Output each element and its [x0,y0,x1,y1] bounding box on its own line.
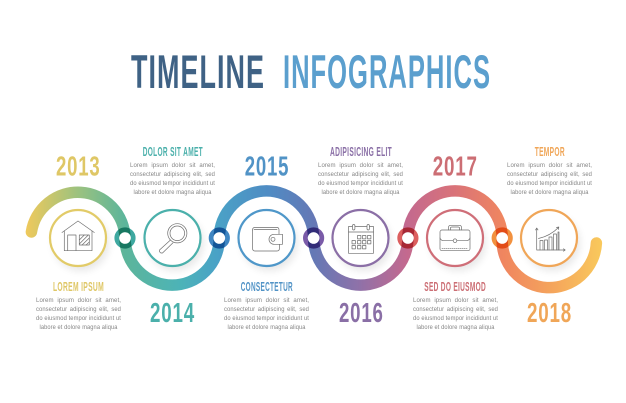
circle: 2018 [521,210,577,266]
icon: magnifying glass [159,224,187,253]
node 5 [494,230,510,246]
text block 3: labore et dolore magna aliqua [228,324,306,331]
node 1 [117,230,133,246]
circle: 2015 [238,210,294,266]
node centres [119,232,508,244]
text block 2: Lorem ipsum dolor sit amet, [130,162,215,169]
year 2017: 2017 [433,150,478,182]
year 2014: 2014 [150,297,195,328]
circle: 2016 [332,210,388,266]
circle: 2013 [50,210,106,266]
text block 1 [36,297,121,331]
text block 6: labore et dolore magna aliqua [510,189,589,196]
heading: consectetur: CONSECTETUR [241,280,293,294]
heading: tempor: TEMPOR [535,145,565,159]
text block 2: consectetur adipiscing elit, sed [130,171,215,178]
text block 4: labore et dolore magna aliqua [322,189,400,196]
icon: calendar [348,224,374,253]
wavy timeline ribbon [31,191,596,288]
year 2018: 2018 [527,297,572,328]
text block 5 [413,297,498,331]
icon: briefcase [440,225,470,251]
text block 2: do eiusmod tempor incididunt ut [130,180,215,187]
text block 6: do eiusmod tempor incididunt ut [507,180,592,187]
text block 5: labore et dolore magna aliqua [416,324,495,331]
text block 1: labore et dolore magna aliqua [40,324,118,331]
year 2016: 2016 [339,297,384,328]
icon: house [62,221,94,251]
text block 5: consectetur adipiscing elit, sed [413,306,498,313]
text block 6 [507,162,592,196]
text block 3: Lorem ipsum dolor sit amet, [224,297,309,304]
circle shadows [53,215,580,271]
year 2015: 2015 [245,150,289,182]
text block 3: do eiusmod tempor incididunt ut [224,315,309,322]
node 2 [211,230,228,246]
heading: adipisicing elit: ADIPISICING ELIT [330,145,392,159]
text block 4: consectetur adipiscing elit, sed [318,171,403,178]
connector nodes [117,230,510,246]
text block 6: consectetur adipiscing elit, sed [507,171,592,178]
circle: 2014 [144,210,200,266]
heading: dolor sit amet: DOLOR SIT AMET [143,145,203,159]
heading: lorem ipsum: LOREM IPSUM [53,280,104,294]
title [131,45,491,98]
text block 5: do eiusmod tempor incididunt ut [413,315,498,322]
text block 2: labore et dolore magna aliqua [134,189,212,196]
text block 3 [224,297,309,331]
text block 4: Lorem ipsum dolor sit amet, [318,162,403,169]
text block 1: consectetur adipiscing elit, sed [36,306,121,313]
title word: timeline: TIMELINE [131,45,265,98]
text block 6: Lorem ipsum dolor sit amet, [507,162,592,169]
text block 4: do eiusmod tempor incididunt ut [318,180,403,187]
node 3 [305,230,322,246]
heading: sed do eiusmod: SED DO EIUSMOD [424,280,486,294]
node 4 [400,230,416,246]
icon: wallet [252,228,282,251]
text block 2 [130,162,215,196]
text block 3: consectetur adipiscing elit, sed [224,306,309,313]
text block 5: Lorem ipsum dolor sit amet, [413,297,498,304]
year 2013: 2013 [56,150,100,182]
icon: growth chart [536,227,565,251]
circle: 2017 [427,210,483,266]
text block 1: do eiusmod tempor incididunt ut [36,315,121,322]
text block 1: Lorem ipsum dolor sit amet, [36,297,121,304]
text block 4 [318,162,403,196]
